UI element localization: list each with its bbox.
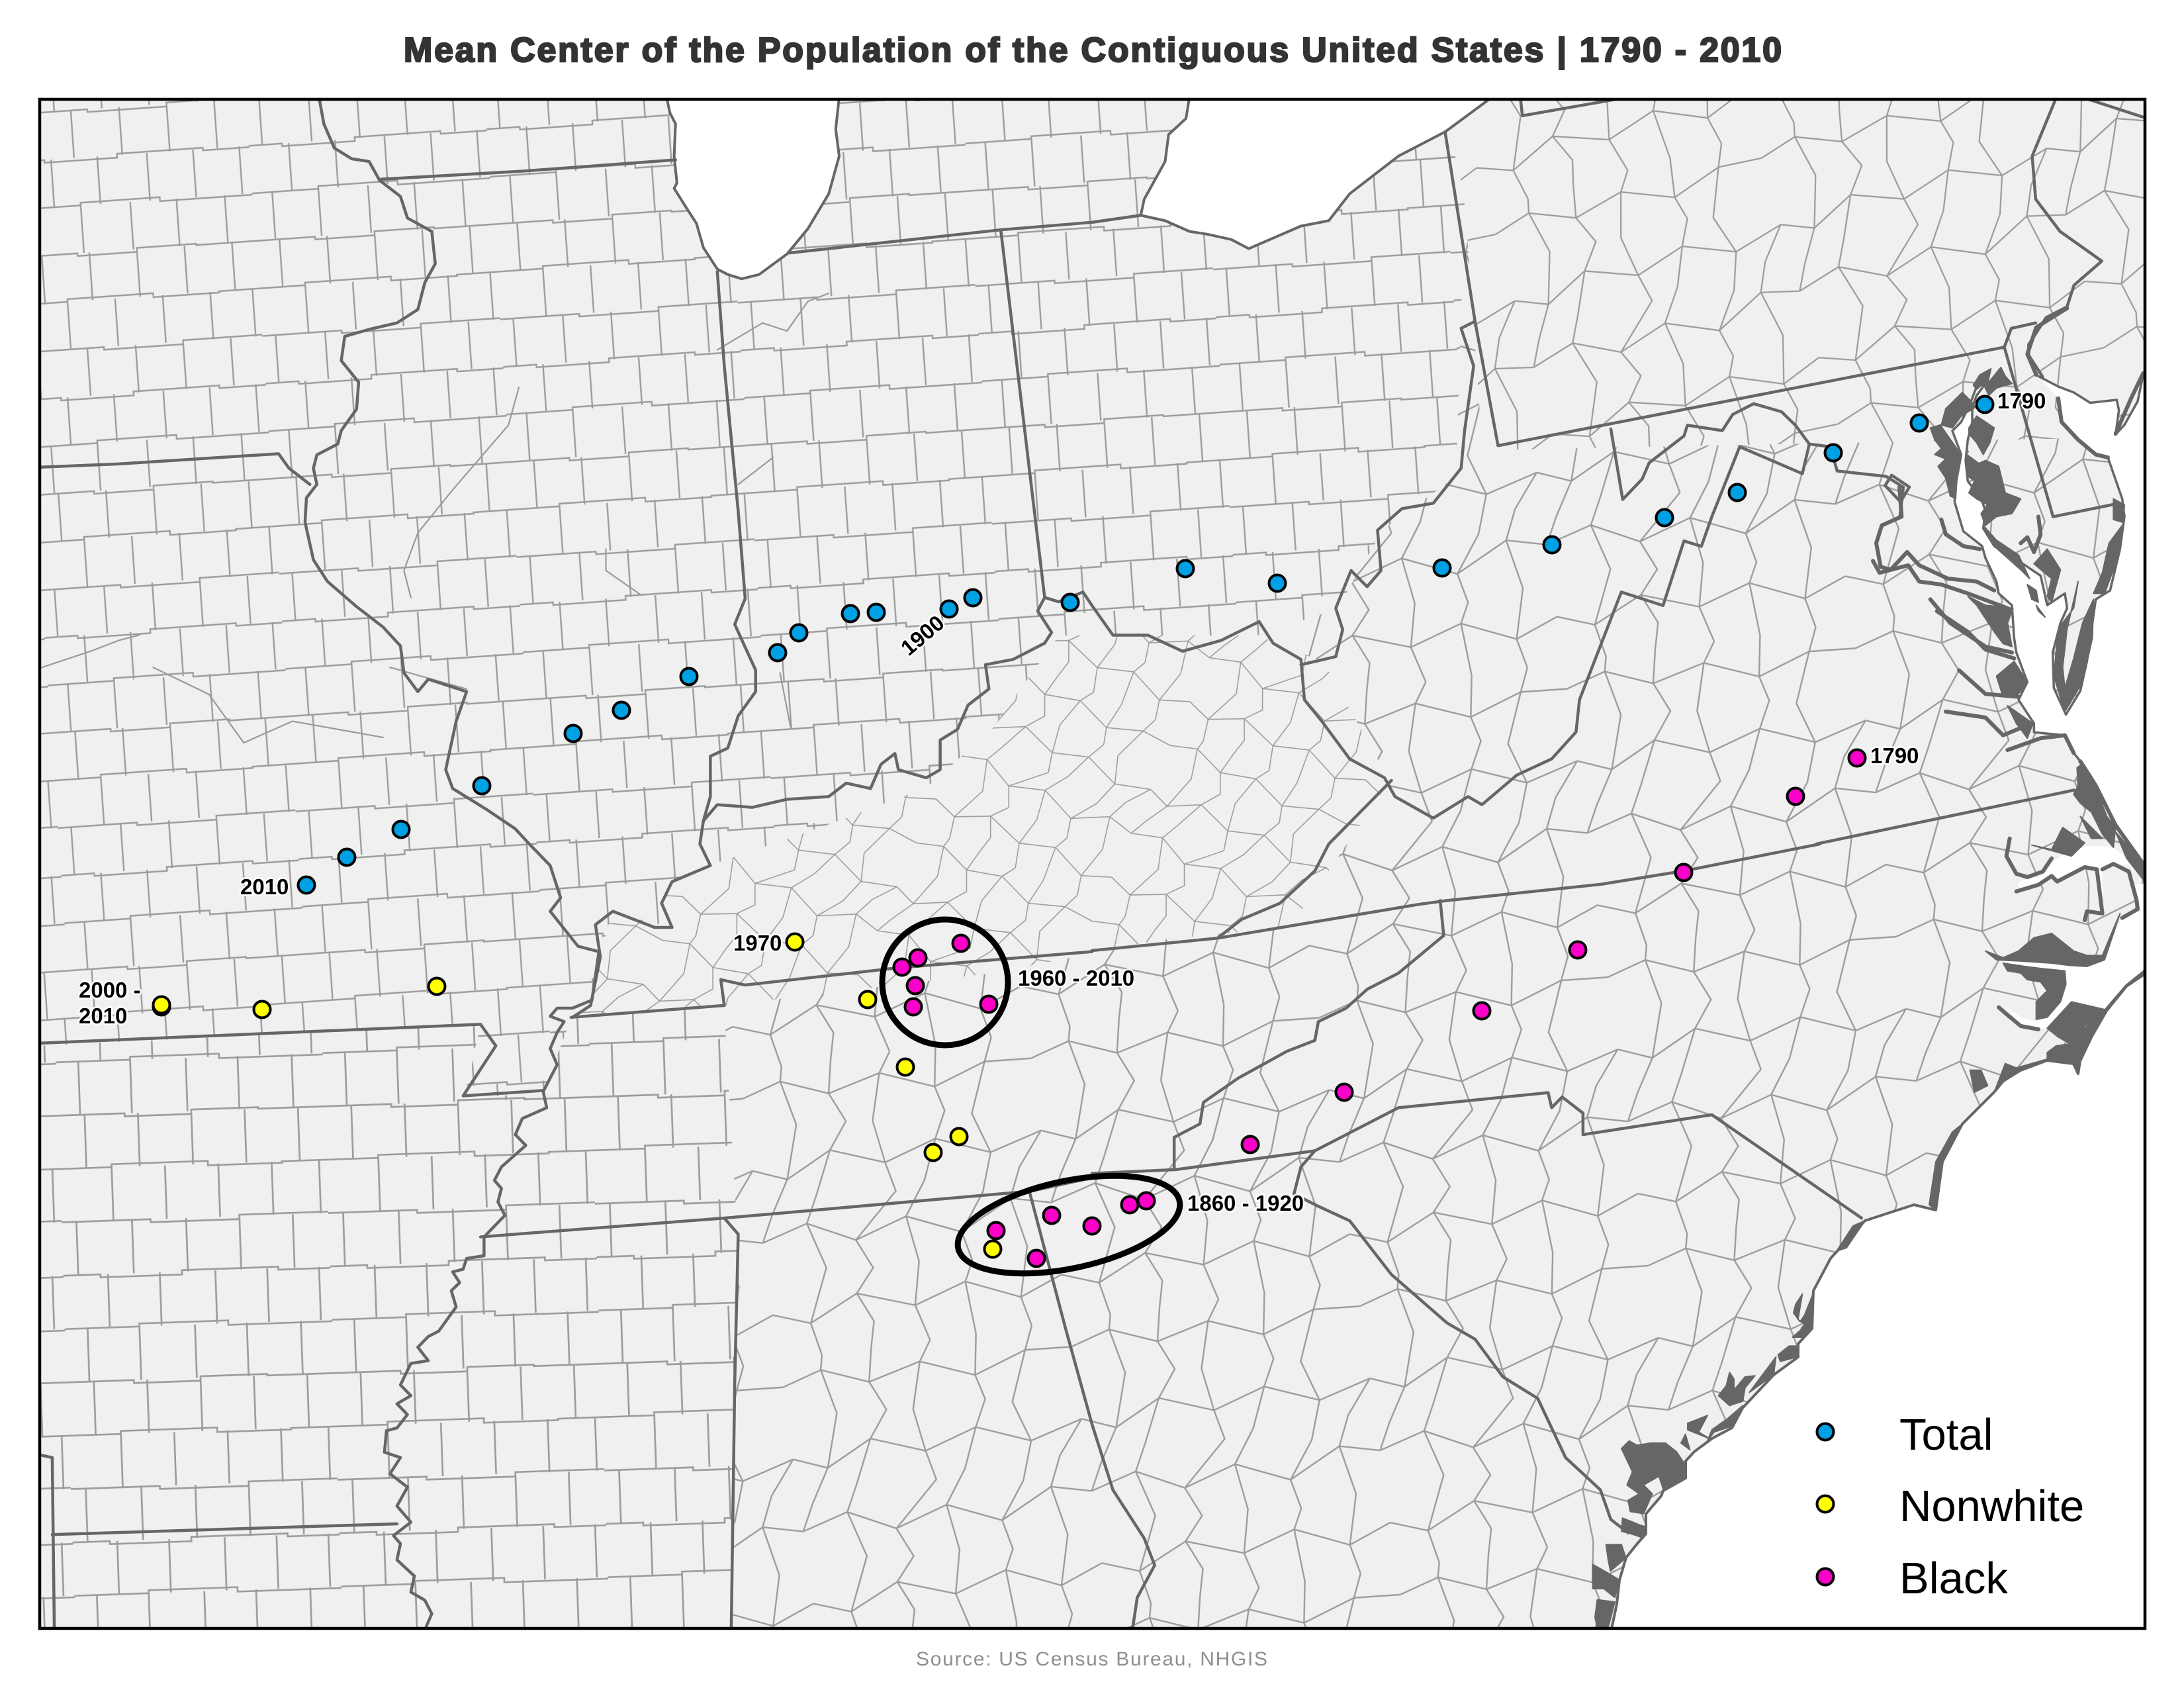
ocean north of the banks [2080, 761, 2149, 867]
tidal rivers [1873, 308, 2143, 753]
bay and ocean water [1952, 373, 2149, 763]
northeast quadrant geography [1092, 97, 2147, 844]
labels: years: 1860 - 1920 [1187, 1191, 1304, 1215]
sound shoreline rivers [1999, 761, 2146, 1070]
labels: years: 1900 [896, 610, 949, 660]
legend: black: Black [1899, 1554, 2008, 1603]
ellipse: 1860 - 1920 cluster [949, 1158, 1189, 1291]
lake michigan [666, 97, 839, 279]
county mesh: east and south [710, 99, 2146, 1629]
labels: years: 1960 - 2010 [1018, 966, 1134, 990]
tidal marsh: lower bay [1968, 499, 2124, 738]
title: Mean Center of the Population of the Contiguous United States | 1790 - 2010 [404, 31, 1782, 70]
county mesh: east and south lines [710, 99, 2146, 1629]
albemarle sound [2019, 846, 2140, 914]
source note: Source: US Census Bureau, NHGIS [916, 1648, 1267, 1670]
southwest quadrant geography [40, 844, 1092, 1630]
north carolina sounds [1970, 761, 2149, 1092]
coastal marsh: south carolina and georgia [1593, 1293, 1813, 1627]
legend: total [1817, 1410, 1993, 1460]
labels: years: 1970 [733, 931, 782, 955]
points: nonwhite population [154, 933, 1001, 1258]
points: black population [893, 749, 1865, 1267]
legend [1817, 1410, 2084, 1603]
labels: years: 2010 [240, 874, 289, 899]
land base [41, 101, 1465, 1099]
coastal marsh: north carolina coast [1837, 1124, 1962, 1251]
labels: years: 2000 - [79, 978, 141, 1002]
county mesh: lower mississippi [40, 1006, 738, 1629]
legend: total: Total [1899, 1410, 1993, 1460]
labels: years: 1790 [1870, 743, 1919, 768]
county mesh: kentucky [572, 635, 1390, 1017]
tidal marsh: sounds [1970, 763, 2146, 1092]
washington dc outline [1885, 475, 1909, 502]
state borders [1092, 97, 2147, 844]
county mesh: kentucky lines [572, 635, 1390, 1017]
circle: 1960 - 2010 cluster [882, 919, 1008, 1045]
pamlico sound [1994, 882, 2149, 1029]
labels: years: 1790 [1997, 389, 2046, 413]
legend: nonwhite [1817, 1481, 2084, 1531]
county mesh: pennsylvania and virginia [1443, 99, 2146, 450]
legend: nonwhite: Nonwhite [1899, 1481, 2084, 1531]
state borders [40, 844, 1092, 1630]
southeast quadrant geography [1092, 844, 1862, 1630]
lake erie [1141, 97, 1492, 249]
state borders [40, 97, 1092, 844]
legend: black [1817, 1554, 2008, 1603]
rivers and county details [42, 293, 829, 743]
chesapeake and delaware bays [1873, 308, 2149, 763]
atlantic ocean: south [1610, 970, 2151, 1635]
labels: years: 2010 [79, 1004, 127, 1028]
points: total population [298, 396, 1993, 894]
bay shoreline [1952, 375, 2143, 761]
state borders [1092, 844, 1862, 1630]
county mesh: lower mississippi lines [40, 1006, 738, 1629]
labels: years [79, 389, 2046, 1215]
county mesh: pennsylvania lines [1443, 99, 2146, 450]
county mesh: midwest [41, 101, 1465, 1213]
tidal marsh: upper bay [1931, 367, 2021, 526]
northwest quadrant geography [40, 97, 1092, 844]
